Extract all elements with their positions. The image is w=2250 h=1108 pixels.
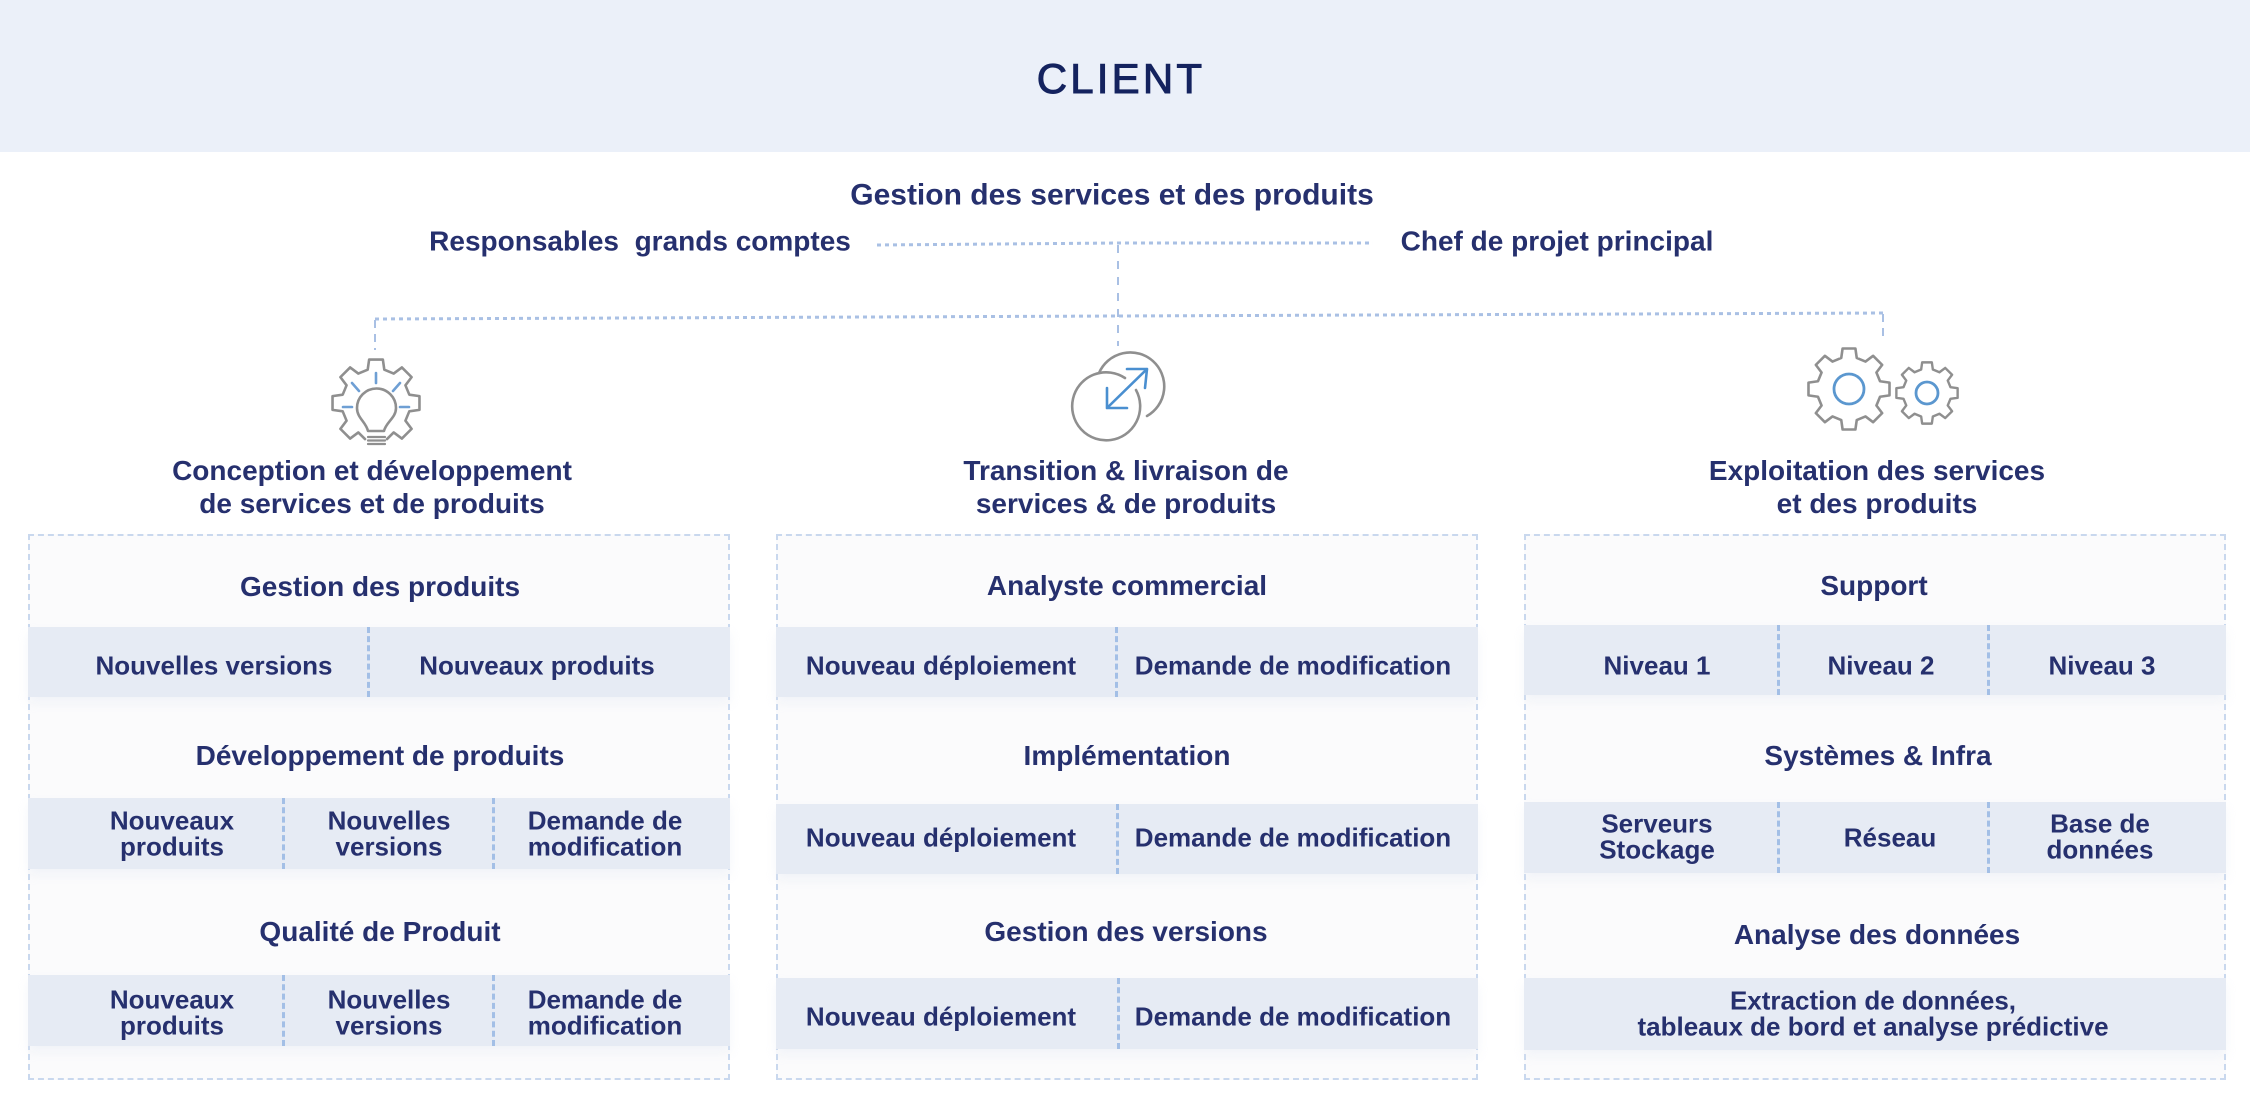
item: data extraction, dashboards and predictive analysis: Extraction de données, [1730,986,2016,1016]
band: product management items [28,627,730,697]
item: database [2047,808,2153,864]
column heading: design and development [172,455,572,519]
header band: client [0,0,2250,152]
heading: service and product management: Gestion des services et des produits [850,178,1374,212]
item: change request: Demande de modification [1135,650,1451,680]
item: data extraction, dashboards and predictive analysis: tableaux de bord et analyse prédictive [1637,1011,2109,1041]
section title: release management: Gestion des versions [984,916,1268,947]
band: product development items [28,798,730,869]
section title: product development: Développement de produits [196,740,564,771]
item: new products: Nouveaux produits [419,650,655,680]
item: servers and storage [1599,808,1715,864]
band: data analysis item [1524,978,2226,1050]
item: new deployment: Nouveau déploiement [806,822,1076,852]
column heading: operations [1709,455,2045,519]
icon: two gears [1808,348,1958,430]
section title: business analyst: Analyste commercial [987,570,1267,601]
column heading: operations: Exploitation des services [1709,455,2045,486]
item: new versions: Nouvelles [328,984,450,1014]
column heading: operations: et des produits [1777,488,1977,519]
column heading: design and development: Conception et développement [172,455,572,486]
item: level 1: Niveau 1 [1604,650,1710,680]
item: data extraction, dashboards and predictive analysis [1637,986,2109,1041]
connector: branch line to three columns [375,313,1883,350]
item: level 2: Niveau 2 [1828,650,1934,680]
column heading: design and development: de services et de produits [199,488,545,519]
item: change request: Demande de modification [1135,1001,1451,1031]
icon: gear with light bulb [333,360,419,444]
item: change request [528,806,682,861]
item: new deployment: Nouveau déploiement [806,650,1076,680]
item: new versions: versions [336,831,442,861]
section title: data analysis: Analyse des données [1734,919,2020,950]
item: change request: modification [528,1010,682,1040]
band: release management items [776,978,1478,1049]
item: database: données [2047,834,2153,864]
item: change request: Demande de [528,984,682,1014]
band: business analyst items [776,627,1478,697]
column heading: transition and delivery: services & de produits [976,488,1276,519]
icon: overlapping circles with double arrow [1072,352,1164,440]
item: new versions [328,806,450,861]
section title: product quality: Qualité de Produit [259,916,501,947]
item: new versions: Nouvelles versions [96,650,332,680]
column heading: transition and delivery [963,455,1289,519]
title: client: CLIENT [1037,55,1205,102]
item: new versions: Nouvelles [328,806,450,836]
item: servers and storage: Serveurs [1601,808,1713,838]
item: new versions: versions [336,1010,442,1040]
section title: implementation: Implémentation [1024,740,1230,771]
column heading: transition and delivery: Transition & livraison de [963,455,1289,486]
band: product quality items [28,975,730,1046]
section title: support: Support [1820,570,1928,601]
band: systems items [1524,802,2226,873]
item: network: Réseau [1844,822,1936,852]
item: new deployment: Nouveau déploiement [806,1001,1076,1031]
panel: transition and delivery [776,534,1478,1080]
panel: operations [1524,534,2226,1080]
connector: top dotted line [877,243,1373,346]
band: implementation items [776,804,1478,874]
item: change request: Demande de modification [1135,822,1451,852]
item: database: Base de [2050,808,2150,838]
item: change request: modification [528,831,682,861]
item: servers and storage: Stockage [1599,834,1715,864]
panel: design and development [28,534,730,1080]
item: new products: produits [120,1010,224,1040]
item: new versions [328,984,450,1040]
item: new products [110,806,234,861]
item: new products: produits [120,831,224,861]
text: account managers: Responsables grands comptes [429,226,851,256]
section title: systems and infrastructure: Systèmes & Infra [1764,740,1992,771]
text: lead project manager: Chef de projet principal [1401,226,1713,256]
section title: product management: Gestion des produits [240,571,520,602]
item: new products [110,984,234,1040]
item: new products: Nouveaux [110,984,234,1014]
band: support levels [1524,625,2226,695]
item: change request: Demande de [528,806,682,836]
item: new products: Nouveaux [110,806,234,836]
item: change request [528,984,682,1040]
item: level 3: Niveau 3 [2049,650,2155,680]
